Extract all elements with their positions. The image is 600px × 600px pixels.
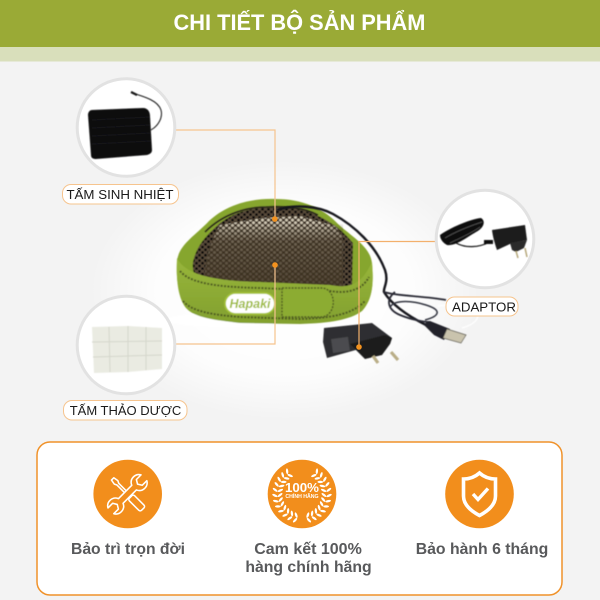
stitching bottom [183,301,365,319]
product: headband with mesh pocket [167,199,373,327]
item: 6 month warranty [416,460,548,558]
callout: herbal pad [64,296,187,420]
label text: TẤM THẢO DƯỢC [70,403,181,418]
icon: heating pad [88,92,161,159]
circle frame [77,296,175,394]
icon: adaptor and coiled cable [440,218,527,258]
label text: ADAPTOR [452,300,516,314]
band rear rim [177,199,373,311]
icon: 100% laurel badge: CHÍNH HÃNG [285,492,319,500]
item: 100% authentic [245,460,372,576]
connector lines [176,130,435,347]
caption: Bảo hành 6 tháng [416,541,548,558]
icon: 100% laurel badge: 100% [285,480,319,495]
item: lifetime maintenance [71,460,185,558]
USB body [423,321,450,340]
USB metal tip [443,329,466,343]
panel: guarantees [37,442,562,595]
band front strap [177,258,373,324]
title: CHI TIẾT BỘ SẢN PHẨM [174,10,425,35]
caption: Bảo trì trọn đời [71,541,185,558]
velcro flap [282,288,333,317]
circle frame [77,79,175,176]
header banner [0,0,600,62]
label text: TẤM SINH NHIỆT [66,187,174,202]
brand logo [225,293,275,314]
stitching top [180,271,369,292]
caption second line: hàng chính hãng [245,559,372,576]
label pill [64,400,187,420]
base shadow [167,313,283,327]
callout: adaptor [436,190,534,316]
mesh pocket inner pad [205,216,343,287]
cables and USB plug [277,207,478,343]
label pill [446,297,518,316]
label pill [62,184,178,204]
caption: Cam kết 100% [254,541,362,558]
icon: herbal pad [92,326,162,373]
panel box [37,442,562,595]
mesh pocket dark [193,208,353,288]
mesh pocket upper edge shadow [205,207,318,232]
icon: 100% laurel badge [268,460,336,528]
circle frame [436,190,534,288]
wall adaptor [323,323,398,363]
mesh pad shading [205,224,343,287]
connector dots [272,216,362,350]
icon: tools [93,460,162,528]
brand logo: Hapaki [230,297,271,311]
icon: shield with check [445,460,514,528]
callout: heating pad [62,79,178,204]
background glow behind product [90,160,480,420]
